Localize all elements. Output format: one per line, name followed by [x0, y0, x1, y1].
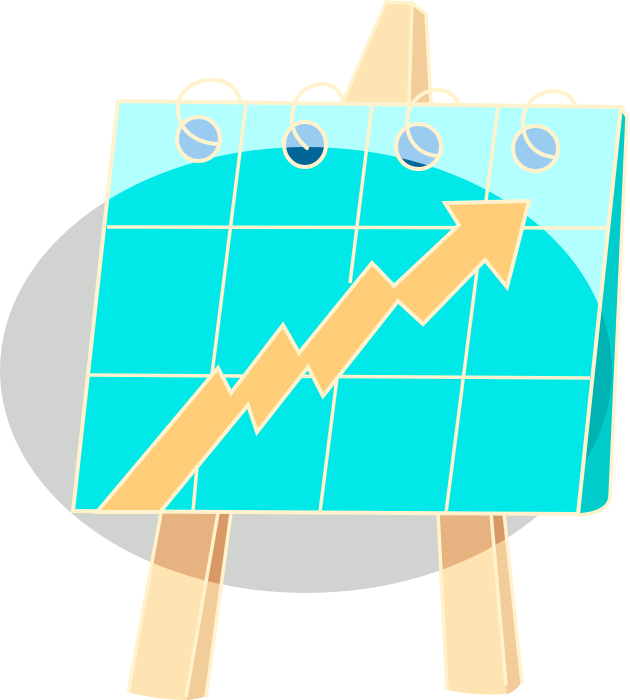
binding rings — [178, 80, 575, 157]
left easel leg — [128, 513, 232, 700]
binding hole 2 — [284, 122, 326, 167]
calendar front sheet — [73, 101, 621, 514]
binding hole 4 — [513, 126, 558, 171]
binding hole 3 — [396, 124, 441, 169]
growth arrow — [97, 201, 529, 512]
grey background ellipse — [0, 147, 612, 593]
right easel leg — [438, 513, 522, 694]
binding hole 1 — [177, 117, 220, 161]
calendar outline — [73, 101, 621, 514]
calendar side panel — [578, 107, 627, 515]
calendar grid lines — [88, 104, 606, 513]
back easel leg — [342, 2, 431, 104]
